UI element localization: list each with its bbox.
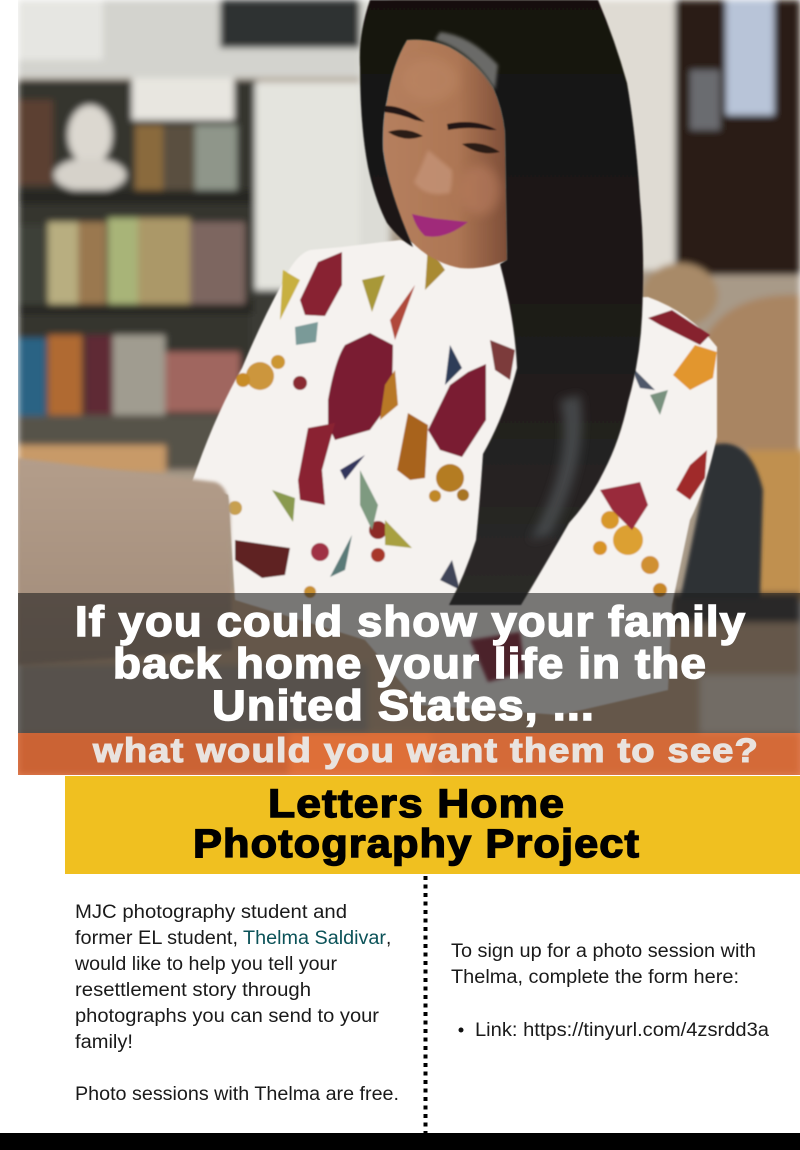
headline	[75, 598, 746, 730]
left text block: family!	[75, 1032, 133, 1053]
yellow title banner	[65, 776, 800, 874]
nose	[414, 150, 452, 194]
left text block: would like to help you tell your	[74, 954, 338, 975]
maroon sleeve detail beside keyboard	[470, 632, 525, 682]
teal leaves	[360, 470, 378, 530]
orange subheadline band	[18, 733, 800, 775]
forehead highlight	[433, 65, 448, 95]
orange and gold flowers	[673, 345, 717, 390]
grey hair sheen	[435, 32, 498, 90]
vertical dotted divider	[424, 876, 428, 1133]
laptop lid	[18, 458, 232, 665]
cheek highlight	[460, 165, 500, 215]
grey headline band	[18, 593, 800, 733]
headline: United States, ...	[212, 682, 595, 730]
subheadline: what would you want them to see?	[92, 732, 759, 770]
maroon smocked florals	[328, 333, 393, 440]
banner title	[193, 782, 640, 866]
left text block: photographs you can send to your	[75, 1006, 380, 1027]
right text block: To sign up for a photo session with	[451, 941, 756, 962]
eyes	[388, 130, 500, 153]
left text block: Thelma Saldivar	[243, 928, 387, 949]
banner title: Letters Home	[268, 782, 565, 826]
right text block	[451, 941, 769, 1041]
headline: back home your life in the	[113, 640, 707, 688]
black footer bar	[0, 1133, 800, 1150]
face and neck	[382, 40, 507, 268]
blouse	[192, 240, 717, 715]
left text block: ,	[386, 928, 391, 949]
right text block: Thelma, complete the form here:	[451, 967, 739, 988]
headline: If you could show your family	[75, 598, 746, 646]
blurred library background	[18, 0, 800, 775]
chair back	[680, 443, 763, 600]
long dark hair	[360, 0, 643, 605]
lips	[412, 214, 468, 237]
left text block: Photo sessions with Thelma are free.	[75, 1084, 399, 1105]
left text block: resettlement story through	[75, 980, 311, 1001]
right text block: Link: https://tinyurl.com/4zsrdd3a	[475, 1020, 769, 1041]
banner title: Photography Project	[193, 822, 640, 866]
eyebrows	[382, 106, 497, 130]
left text block: former EL student,	[75, 928, 238, 949]
left text block	[74, 902, 399, 1105]
left text block: MJC photography student and	[75, 902, 347, 923]
photo: student at a laptop	[18, 0, 800, 775]
